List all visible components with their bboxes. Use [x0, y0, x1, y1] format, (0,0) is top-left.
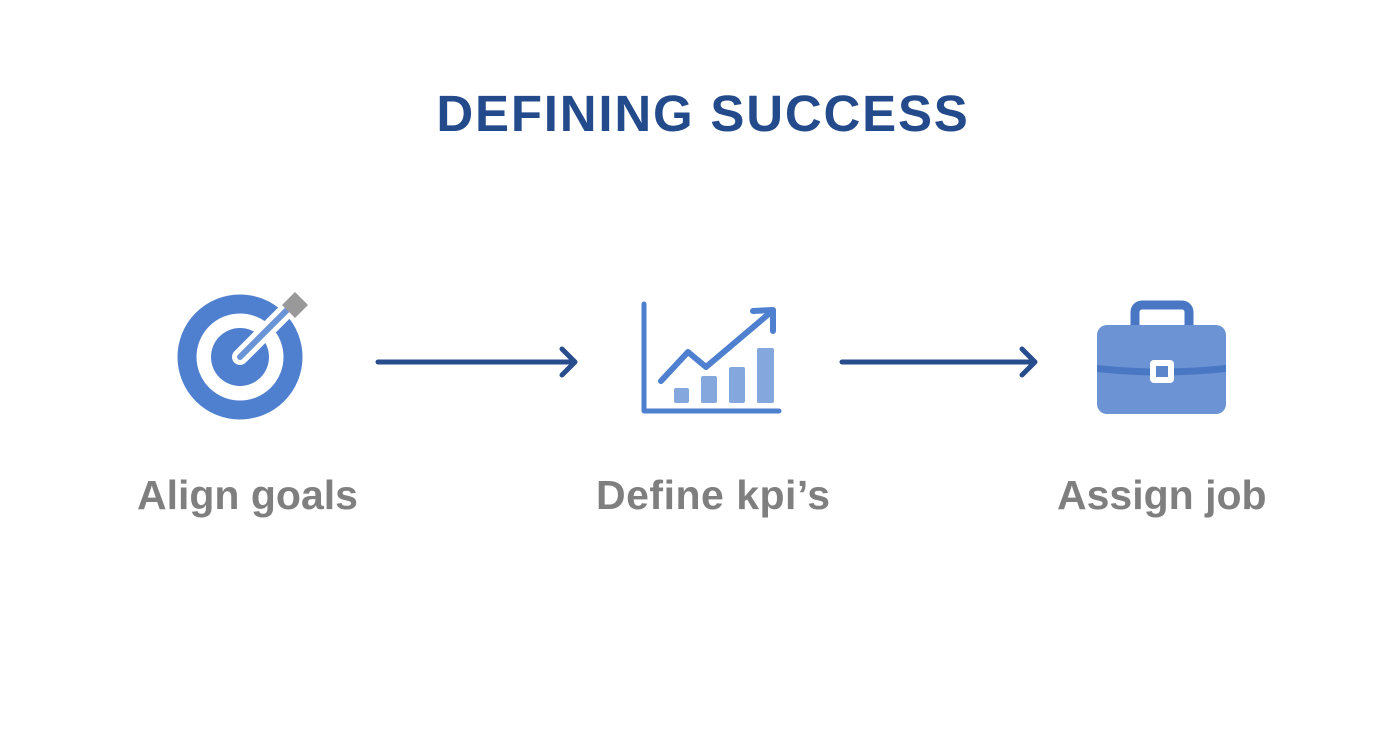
arrow 2	[840, 346, 1038, 378]
label: define kpis: Define kpi’s	[596, 472, 831, 518]
icon: target	[178, 292, 308, 420]
arrow 1	[376, 346, 578, 378]
icon: chart	[642, 302, 782, 414]
label: assign job: Assign job	[1057, 472, 1267, 518]
icon: briefcase	[1097, 300, 1226, 414]
label: align goals: Align goals	[137, 472, 358, 518]
title: DEFINING SUCCESS	[436, 85, 970, 142]
